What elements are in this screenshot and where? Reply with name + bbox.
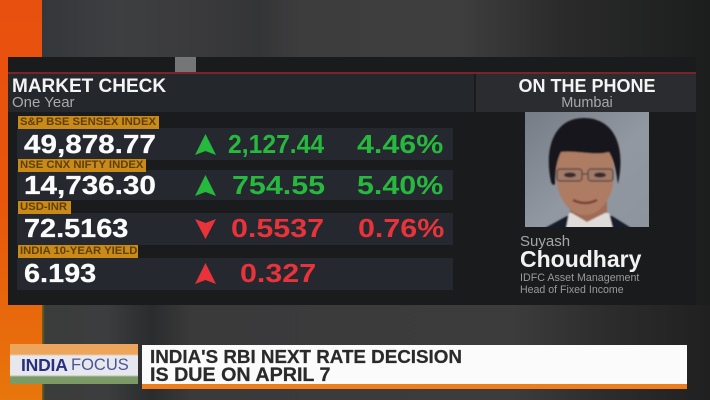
- value: usd-inr: 72.5163: [24, 213, 128, 243]
- value: sensex: 49,878.77: [24, 129, 156, 159]
- label: usd-inr: USD-INR: [20, 201, 67, 213]
- label: nifty: NSE CNX NIFTY INDEX: [20, 159, 143, 171]
- subheading: One Year: [12, 94, 75, 111]
- phone heading: ON THE PHONE: [518, 76, 656, 96]
- headline line two: IS DUE ON APRIL 7: [150, 364, 331, 386]
- percent: sensex: 4.46%: [357, 129, 443, 159]
- panel: market check: [8, 72, 696, 112]
- percent: nifty: 5.40%: [357, 170, 443, 200]
- change: sensex: 2,127.44: [228, 129, 324, 159]
- red rule: [8, 72, 696, 74]
- portrait: [525, 112, 649, 227]
- label: sensex: S&P BSE SENSEX INDEX: [20, 116, 156, 128]
- guest last name: Choudhary: [520, 246, 641, 272]
- phone header band: [476, 74, 696, 112]
- india focus badge: [10, 344, 138, 384]
- change: nifty: 754.55: [232, 170, 325, 200]
- guest title: Head of Fixed Income: [520, 284, 624, 296]
- headline accent bar: [142, 384, 687, 389]
- headline box: [142, 345, 687, 388]
- arrow up green: [195, 134, 216, 155]
- phone location: Mumbai: [561, 95, 613, 111]
- main dark panel: [8, 57, 696, 305]
- arrow up red: [195, 263, 216, 284]
- percent: usd-inr: 0.76%: [358, 213, 444, 243]
- heading: MARKET CHECK: [12, 76, 166, 97]
- badge text focus: FOCUS: [71, 356, 129, 374]
- top bar highlight: [175, 57, 196, 72]
- bottom backdrop: [42, 305, 710, 400]
- badge text india: INDIA: [21, 355, 68, 375]
- change: india yield: 0.327: [240, 258, 316, 288]
- panel: on the phone: [476, 74, 696, 296]
- arrow up green: [195, 175, 216, 196]
- headline line one: INDIA'S RBI NEXT RATE DECISION: [150, 346, 462, 367]
- orange side strip: [0, 0, 42, 400]
- value: nifty: 14,736.30: [24, 170, 156, 200]
- guest first name: Suyash: [520, 233, 570, 250]
- arrow down red: [195, 219, 216, 239]
- guest company: IDFC Asset Management: [520, 272, 639, 284]
- change: usd-inr: 0.5537: [231, 213, 324, 243]
- market check header band: [8, 74, 474, 112]
- value: india yield: 6.193: [24, 258, 96, 288]
- label: india yield: INDIA 10-YEAR YIELD: [20, 245, 137, 257]
